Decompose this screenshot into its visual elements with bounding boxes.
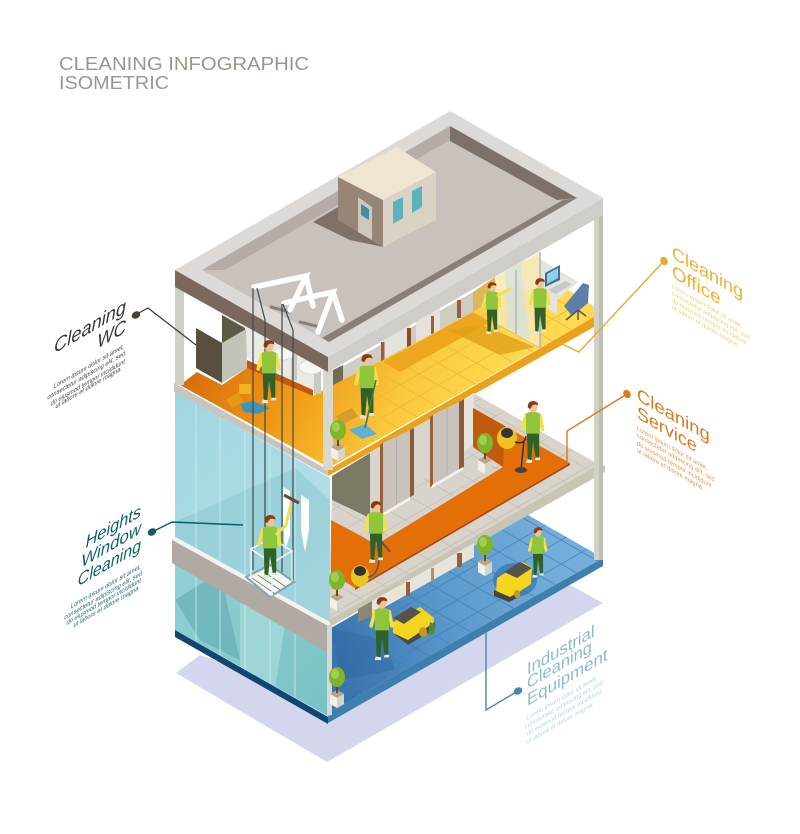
label: industrial cleaning equipment: ut labore et dolore magna. — [527, 701, 594, 746]
label: heights window cleaning: Cleaning — [78, 535, 142, 591]
label: industrial cleaning equipment: Lorem ipsum dolor sit amet, — [527, 674, 597, 722]
office desk and monitor — [517, 257, 578, 315]
glass partition — [495, 252, 540, 348]
label: industrial cleaning equipment: consectetur adipiscing elit, sed — [525, 679, 603, 731]
top floor slab edge — [174, 383, 328, 476]
worker: office woman — [530, 278, 549, 334]
cleaning staff — [258, 278, 549, 660]
floor scrubber machines — [393, 562, 537, 645]
title: CLEANING INFOGRAPHIC — [59, 54, 309, 74]
label: heights window cleaning: consectetur adipiscing elit, sed — [64, 570, 142, 622]
bucket — [336, 408, 358, 425]
label: cleaning office: Office — [672, 261, 720, 309]
leader: cleaning wc — [130, 308, 196, 345]
vacuum cleaners — [351, 427, 527, 587]
label: industrial cleaning equipment: Cleaning — [527, 636, 592, 693]
title: ISOMETRIC — [59, 73, 169, 93]
label: cleaning wc: consectetur adipiscing elit, sed — [47, 350, 125, 402]
label: cleaning service: ut labore et dolore magna. — [637, 447, 704, 492]
label: heights window cleaning: Lorem ipsum dolor sit amet, — [71, 563, 141, 611]
lower floor — [328, 515, 603, 723]
label: heights window cleaning: ut labore et dolore magna. — [73, 584, 140, 629]
label: industrial cleaning equipment — [525, 621, 608, 746]
worker: window washer — [259, 495, 299, 578]
label: cleaning wc: Cleaning — [54, 296, 126, 359]
worker: scrubber woman — [371, 597, 392, 660]
label: cleaning wc: WC — [97, 316, 126, 354]
label: heights window cleaning: Heights — [86, 501, 141, 552]
sinks — [272, 348, 323, 394]
label: cleaning office: ut labore et dolore magna. — [672, 304, 739, 349]
water puddle — [240, 401, 270, 414]
WC room — [180, 310, 330, 467]
label: cleaning service: Cleaning — [637, 384, 710, 446]
cleaned window streak — [283, 487, 309, 552]
label: cleaning service: consectetur adipiscing elit, sed — [637, 432, 715, 484]
top floor back wall — [333, 277, 495, 394]
windows — [393, 186, 422, 224]
ground shadow — [176, 585, 603, 762]
label: cleaning service: do eiusmod tempor incididunt — [637, 440, 712, 490]
building — [172, 111, 605, 724]
label: cleaning wc: do eiusmod tempor incididunt — [51, 357, 126, 408]
label: cleaning office — [672, 242, 750, 349]
roof — [175, 111, 603, 372]
cleaning gondola — [246, 538, 294, 597]
leader: cleaning service — [567, 388, 632, 462]
roof penthouse — [313, 147, 436, 247]
door — [358, 197, 372, 240]
mid band — [172, 537, 330, 654]
leader: industrial equipment — [486, 632, 524, 710]
office chair — [564, 283, 589, 320]
label: cleaning office: consectetur adipiscing elit, sed — [672, 290, 750, 342]
title — [59, 54, 309, 93]
elevator doors and wall panels — [380, 393, 474, 516]
middle floor — [326, 393, 605, 628]
worker: vacuum lower — [365, 501, 386, 563]
label: cleaning office: Lorem ipsum dolor sit amet, — [672, 283, 742, 331]
mop puddle — [349, 424, 377, 439]
worker: wc mopping — [258, 340, 279, 403]
label: cleaning office: do eiusmod tempor incididunt — [672, 297, 747, 347]
label: cleaning service: Service — [637, 402, 697, 457]
label: cleaning wc: Lorem ipsum dolor sit amet, — [54, 343, 124, 391]
label: industrial cleaning equipment: do eiusmod tempor incididunt — [527, 688, 602, 738]
label: cleaning wc — [47, 296, 126, 410]
label: cleaning wc: ut labore et dolore magna. — [55, 365, 122, 410]
label: industrial cleaning equipment: Industrial — [527, 621, 595, 679]
label: cleaning service — [637, 384, 715, 492]
worker: floor mopping — [356, 354, 377, 428]
wet floor sign and bucket — [226, 384, 251, 408]
plants — [329, 420, 493, 708]
columns — [175, 212, 603, 715]
office floor and yellow floor — [328, 252, 603, 476]
label: cleaning office: Cleaning — [672, 242, 743, 303]
label: heights window cleaning: do eiusmod tempor incididunt — [67, 576, 142, 627]
label: heights window cleaning — [64, 501, 143, 629]
orange carpet — [331, 408, 570, 588]
roof davits — [254, 276, 342, 332]
leader: heights window cleaning — [146, 522, 243, 537]
worker: scrubber man — [529, 527, 546, 578]
label: cleaning service: Lorem ipsum dolor sit amet, — [637, 425, 707, 473]
glass facade — [172, 392, 330, 724]
label: heights window cleaning: Window — [81, 517, 143, 572]
worker: office glass — [483, 282, 511, 334]
leader: cleaning office — [560, 255, 669, 352]
label: industrial cleaning equipment: Equipment — [527, 644, 608, 710]
worker: vacuum upper — [522, 401, 543, 463]
suspension ropes — [253, 288, 293, 580]
